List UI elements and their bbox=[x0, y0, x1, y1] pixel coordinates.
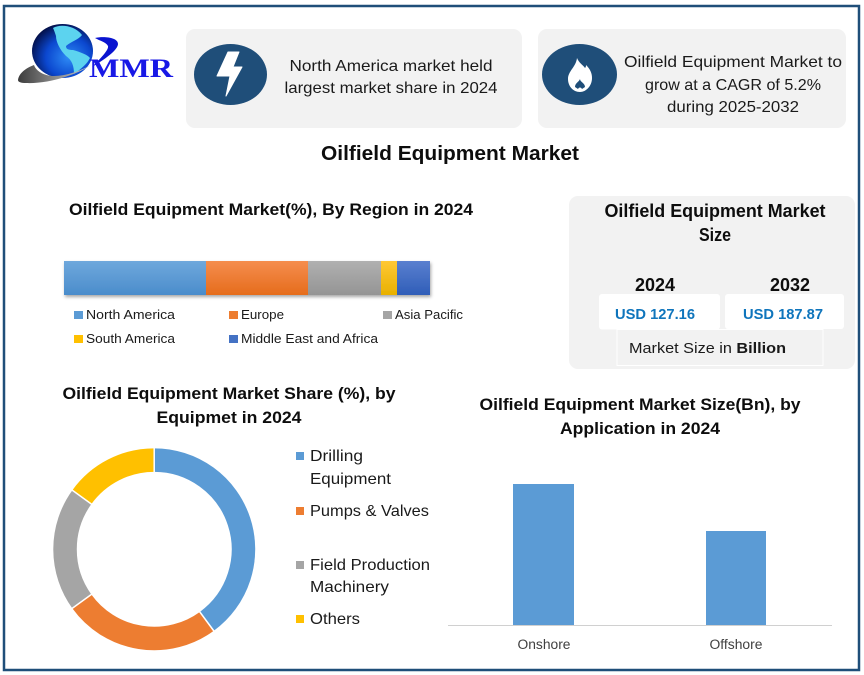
panel heading bbox=[604, 201, 826, 245]
bar: offshore bbox=[706, 531, 766, 626]
callout: CAGR bbox=[538, 29, 846, 128]
panel heading: Oilfield Equipment Market bbox=[604, 201, 826, 221]
year 2024: 2024 bbox=[635, 275, 675, 295]
legend: Pumps & Valves bbox=[310, 503, 429, 520]
logo blue hook bbox=[92, 37, 118, 67]
callout: North America bbox=[186, 29, 522, 128]
logo: MMR globe bbox=[18, 24, 173, 83]
chart heading: Oilfield Equipment Market(%), By Region in 2024 bbox=[69, 200, 474, 219]
logo wordmark: MMR bbox=[89, 54, 173, 83]
legend: North America bbox=[86, 307, 176, 322]
column chart: by application bbox=[448, 395, 832, 652]
chart heading: Application in 2024 bbox=[560, 419, 721, 438]
legend: South America bbox=[86, 331, 176, 346]
callout text: during 2025-2032 bbox=[667, 99, 799, 116]
chart heading: Oilfield Equipment Market Share (%), by bbox=[62, 384, 396, 403]
callout background bbox=[538, 29, 846, 128]
icon: flame bbox=[542, 44, 617, 105]
legend bbox=[296, 448, 430, 628]
callout text: largest market share in 2024 bbox=[284, 80, 498, 97]
panel heading: Size bbox=[699, 225, 731, 245]
legend: Drilling bbox=[310, 448, 363, 465]
logo globe bbox=[32, 24, 93, 78]
value card 2024 bbox=[599, 294, 720, 330]
legend bbox=[74, 307, 463, 346]
value card 2032: USD 187.87 bbox=[743, 306, 823, 323]
logo swoosh bbox=[18, 65, 91, 83]
logo continents bbox=[53, 26, 90, 74]
axis bbox=[448, 624, 832, 626]
axis label: onshore: Onshore bbox=[518, 637, 570, 652]
stacked bar bbox=[64, 261, 430, 295]
callout background bbox=[186, 29, 522, 128]
legend: Field Production bbox=[310, 557, 430, 574]
axis label: offshore: Offshore bbox=[710, 637, 762, 652]
panel background bbox=[569, 196, 855, 369]
donut chart: by equipment bbox=[62, 384, 430, 639]
unit note bbox=[617, 330, 823, 366]
donut bbox=[65, 447, 243, 639]
value card 2024: USD 127.16 bbox=[615, 306, 695, 323]
legend: Equipment bbox=[310, 471, 392, 488]
bar: onshore bbox=[513, 484, 574, 626]
icon: lightning bolt bbox=[194, 44, 267, 105]
legend: Machinery bbox=[310, 579, 389, 596]
chart heading: Oilfield Equipment Market Size(Bn), by bbox=[480, 395, 801, 414]
chart heading bbox=[62, 384, 396, 427]
callout text: grow at a CAGR of 5.2% bbox=[645, 77, 821, 94]
value card 2032 bbox=[725, 294, 844, 329]
panel: market size bbox=[569, 196, 855, 369]
callout text bbox=[624, 54, 842, 116]
legend: Middle East and Africa bbox=[241, 331, 379, 346]
unit note: Market Size in Billion bbox=[629, 340, 786, 357]
year 2032: 2032 bbox=[770, 275, 810, 295]
chart heading bbox=[480, 395, 801, 438]
legend: Europe bbox=[241, 307, 284, 322]
callout text bbox=[284, 58, 498, 97]
legend: Others bbox=[310, 611, 360, 628]
legend: Asia Pacific bbox=[395, 307, 463, 322]
callout text: North America market held bbox=[290, 58, 492, 75]
stacked bar chart: by region bbox=[64, 200, 474, 346]
title: Oilfield Equipment Market bbox=[321, 143, 579, 165]
chart heading: Equipmet in 2024 bbox=[156, 408, 302, 427]
callout text: Oilfield Equipment Market to bbox=[624, 54, 842, 71]
